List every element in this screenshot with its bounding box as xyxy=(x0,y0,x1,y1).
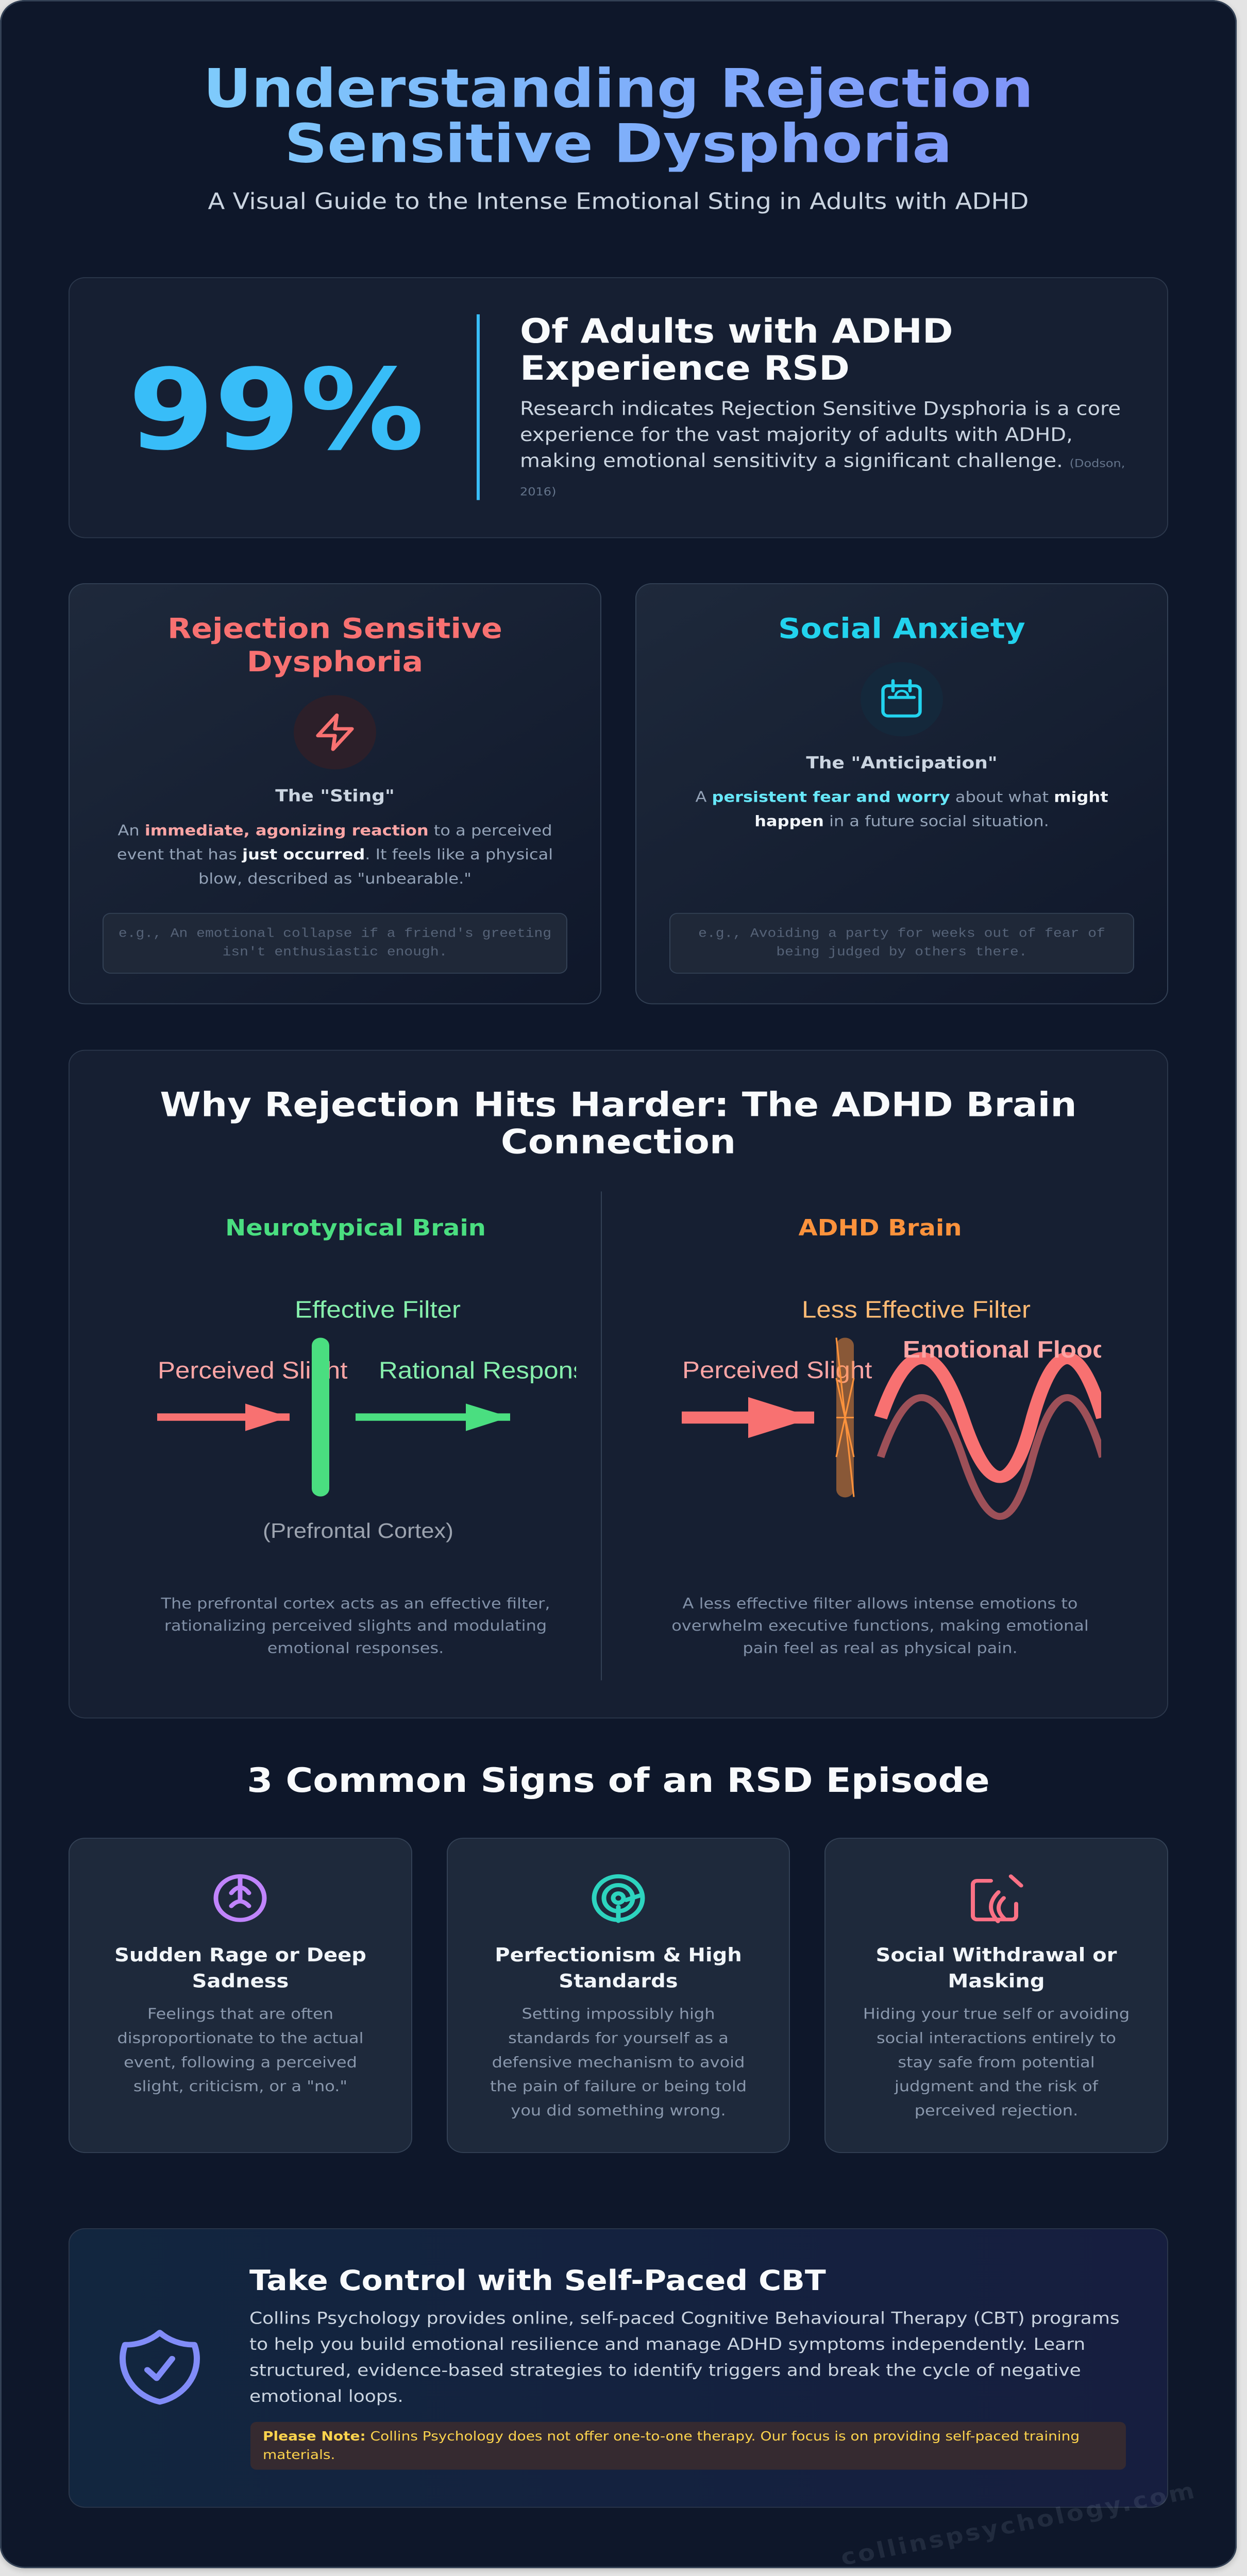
panel: call to action xyxy=(69,2228,1168,2508)
arrow: slight through filter xyxy=(682,1397,814,1438)
sign description: slight, criticism, or a "no." xyxy=(133,2077,347,2095)
wave: emotional flood secondary xyxy=(881,1398,1103,1516)
subheading: the anticipation: The "Anticipation" xyxy=(806,754,998,773)
RSD description xyxy=(117,821,553,887)
sign title xyxy=(876,1944,1117,1992)
column divider xyxy=(601,1192,602,1681)
stat description: 2016) xyxy=(520,485,556,498)
social anxiety description: A persistent fear and worry about what might xyxy=(695,788,1108,806)
title: Understanding Rejection xyxy=(203,58,1034,120)
text: neurotypical explanation: emotional responses. xyxy=(267,1639,444,1657)
stat number: 99% xyxy=(128,345,424,475)
heading: RSD: Rejection Sensitive xyxy=(167,613,502,645)
subheading: the sting: The "Sting" xyxy=(275,787,395,806)
icon: purple face xyxy=(213,1874,267,1922)
sign description xyxy=(863,2005,1130,2119)
label: prefrontal cortex: (Prefrontal Cortex) xyxy=(263,1519,453,1543)
CTA description xyxy=(249,2309,1120,2406)
diagram: neurotypical filter xyxy=(157,1297,576,1543)
panel: sign two xyxy=(447,1838,790,2153)
arrow: filter to response xyxy=(356,1403,510,1431)
sign title: Sadness xyxy=(192,1971,289,1992)
stat heading xyxy=(520,312,953,388)
heading: brain connection: Connection xyxy=(501,1122,736,1161)
note text: Please Note: Collins Psychology does not offer one-to-one therapy. Our focus is on providing self-paced training xyxy=(263,2428,1080,2444)
social anxiety description xyxy=(695,788,1108,829)
title: Sensitive Dysphoria xyxy=(284,113,952,175)
CTA description: emotional loops. xyxy=(249,2387,403,2406)
social anxiety example box: being judged by others there. xyxy=(776,945,1027,959)
broken filter bar xyxy=(836,1337,854,1497)
text: ADHD explanation: pain feel as real as physical pain. xyxy=(743,1639,1018,1657)
subtitle: A Visual Guide to the Intense Emotional Sting in Adults with ADHD xyxy=(208,189,1029,214)
wave: emotional flood primary xyxy=(881,1358,1103,1477)
RSD description: event that has just occurred. It feels like a physical xyxy=(117,845,553,863)
heading: ADHD brain: ADHD Brain xyxy=(799,1215,962,1241)
sign title: Standards xyxy=(559,1971,678,1992)
panel: social anxiety xyxy=(635,583,1168,1004)
sign title xyxy=(114,1944,366,1992)
icon: lightning bolt xyxy=(294,695,376,769)
sign description: you did something wrong. xyxy=(511,2102,726,2119)
panel: rejection sensitive dysphoria xyxy=(69,583,601,1004)
heading: social anxiety: Social Anxiety xyxy=(778,613,1025,645)
icon: mask xyxy=(971,1874,1023,1923)
stat heading: Of Adults with ADHD xyxy=(520,312,953,350)
text: neurotypical explanation: rationalizing perceived slights and modulating xyxy=(164,1617,547,1634)
stat description: Research indicates Rejection Sensitive Dysphoria is a core xyxy=(520,398,1121,420)
text: ADHD explanation: A less effective filter allows intense emotions to xyxy=(683,1595,1077,1612)
heading: RSD xyxy=(167,613,502,679)
sign title: Perfectionism & High xyxy=(495,1944,742,1966)
panel: sign three xyxy=(824,1838,1168,2153)
sign description: event, following a perceived xyxy=(124,2053,357,2071)
arrow: slight to filter xyxy=(157,1403,290,1431)
sign description: defensive mechanism to avoid xyxy=(492,2053,745,2071)
filter bar xyxy=(312,1337,329,1497)
sign title xyxy=(495,1944,742,1992)
RSD example box: e.g., An emotional collapse if a friend's greeting xyxy=(119,927,551,941)
heading: common signs: 3 Common Signs of an RSD Episode xyxy=(247,1760,990,1800)
CTA description: Collins Psychology provides online, self-paced Cognitive Behavioural Therapy (CBT) programs xyxy=(249,2309,1120,2328)
icon: calendar xyxy=(861,662,943,736)
RSD description: An immediate, agonizing reaction to a perceived xyxy=(117,821,552,839)
RSD example box xyxy=(103,913,567,974)
stat heading: Experience RSD xyxy=(520,349,850,388)
RSD description: blow, described as "unbearable." xyxy=(198,870,471,887)
label: effective filter: Effective Filter xyxy=(295,1297,461,1323)
text: ADHD explanation: overwhelm executive functions, making emotional xyxy=(671,1617,1089,1634)
label: perceived slight: Perceived Slight xyxy=(682,1357,872,1383)
sign description: perceived rejection. xyxy=(915,2102,1078,2119)
heading: brain connection xyxy=(160,1085,1077,1161)
sign description: the pain of failure or being told xyxy=(490,2077,747,2095)
CTA heading: Take Control with Self-Paced CBT xyxy=(249,2264,826,2297)
text: neurotypical explanation: The prefrontal cortex acts as an effective filter, xyxy=(161,1595,550,1612)
CTA description: structured, evidence-based strategies to identify triggers and break the cycle of negative xyxy=(249,2361,1081,2380)
social anxiety example box: e.g., Avoiding a party for weeks out of fear of xyxy=(698,927,1105,941)
label: less effective filter: Less Effective Filter xyxy=(802,1297,1031,1323)
panel: 99 percent statistic xyxy=(69,277,1168,538)
label: perceived slight: Perceived Slight xyxy=(158,1358,348,1384)
sign title: Sudden Rage or Deep xyxy=(114,1944,366,1966)
sign description: Setting impossibly high xyxy=(521,2005,715,2023)
stat description: experience for the vast majority of adults with ADHD, xyxy=(520,425,1073,446)
sign description xyxy=(117,2005,364,2095)
sign description xyxy=(490,2005,747,2119)
CTA description: to help you build emotional resilience and manage ADHD symptoms independently. Learn xyxy=(249,2335,1085,2354)
sign description: standards for yourself as a xyxy=(508,2029,729,2047)
sign title: Masking xyxy=(948,1971,1045,1992)
diagram: ADHD filter xyxy=(682,1297,1101,1520)
note text xyxy=(263,2428,1080,2462)
title xyxy=(69,61,1168,172)
sign description: disproportionate to the actual xyxy=(117,2029,364,2047)
text: ADHD explanation xyxy=(671,1595,1089,1657)
heading: brain connection: Why Rejection Hits Harder: The ADHD Brain xyxy=(160,1085,1077,1124)
icon: target xyxy=(592,1874,645,1923)
social anxiety example box xyxy=(669,913,1134,974)
stat divider xyxy=(477,314,480,500)
sign description: Feelings that are often xyxy=(147,2005,333,2023)
panel: sign one xyxy=(69,1838,412,2153)
social anxiety description: happen in a future social situation. xyxy=(754,812,1049,829)
RSD example box: isn't enthusiastic enough. xyxy=(223,945,447,959)
watermark: collinspsychology.com xyxy=(838,2477,1199,2571)
stat description xyxy=(520,398,1125,498)
text: neurotypical explanation xyxy=(161,1595,550,1657)
sign description: social interactions entirely to xyxy=(877,2029,1116,2047)
heading: RSD: Dysphoria xyxy=(247,646,423,679)
sign description: judgment and the risk of xyxy=(895,2077,1098,2095)
please note callout xyxy=(250,2422,1126,2470)
sign description: stay safe from potential xyxy=(898,2053,1095,2071)
sign title: Social Withdrawal or xyxy=(876,1944,1117,1966)
stat description: making emotional sensitivity a significant challenge. (Dodson, xyxy=(520,450,1125,472)
heading: neurotypical brain: Neurotypical Brain xyxy=(225,1215,486,1241)
panel: brain connection xyxy=(69,1050,1168,1718)
sign description: Hiding your true self or avoiding xyxy=(863,2005,1130,2023)
note text: materials. xyxy=(263,2447,335,2462)
icon: shield check xyxy=(120,2330,200,2405)
